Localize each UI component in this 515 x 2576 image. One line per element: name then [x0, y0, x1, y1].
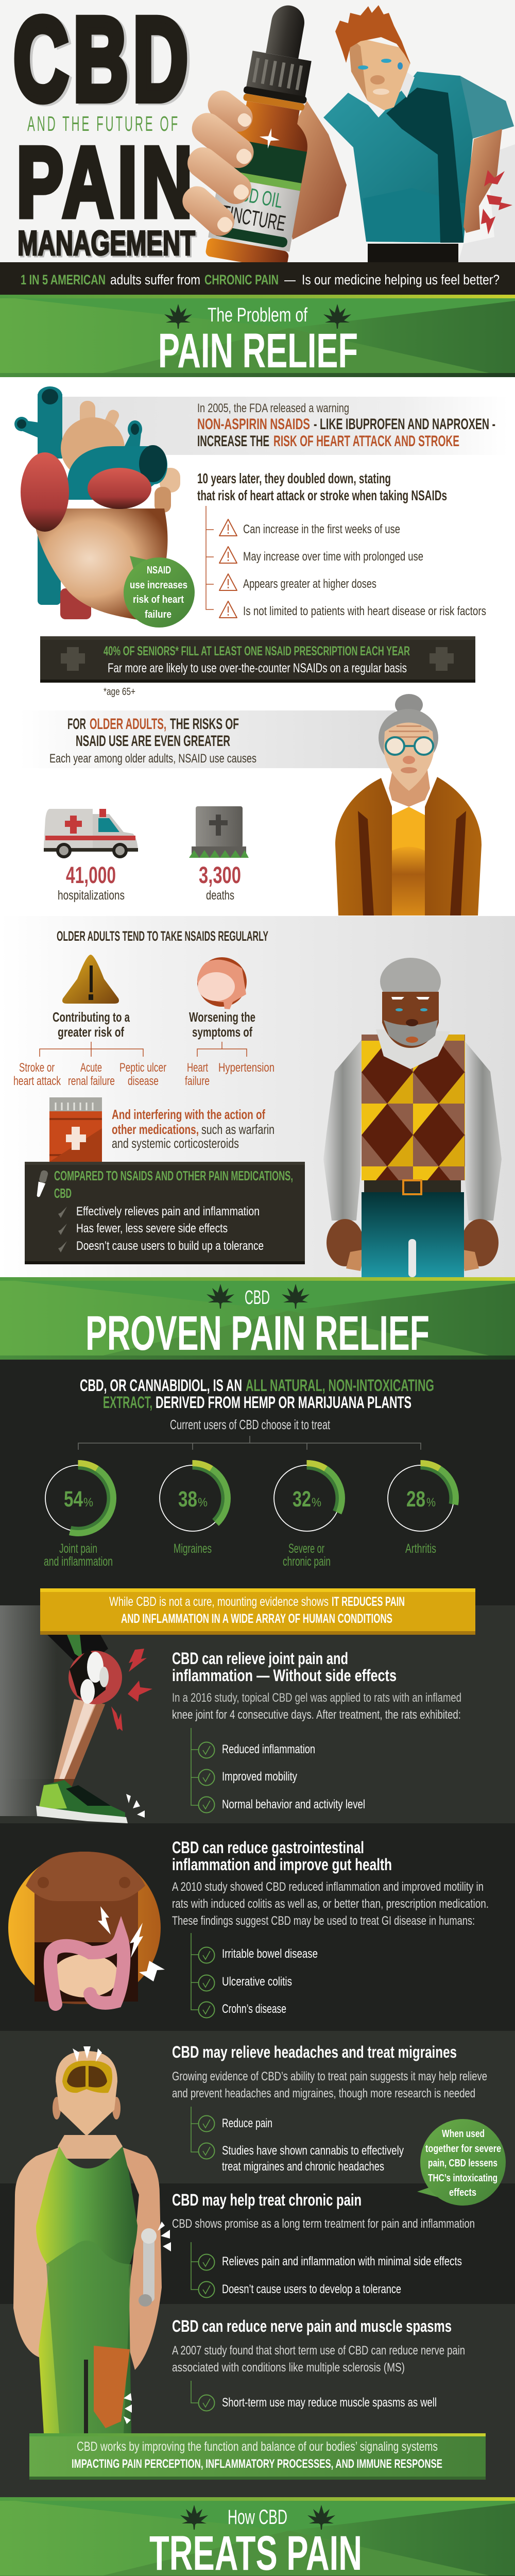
leg illustration — [36, 1635, 152, 1823]
migraine block: Studies have shown cannabis to effectively — [222, 2144, 404, 2158]
icon: caution triangle — [62, 955, 119, 1004]
NSAID risk statement — [197, 470, 447, 503]
joint pain block — [172, 1649, 461, 1812]
callout: THC: When used — [442, 2128, 485, 2140]
icon: dropper — [35, 1170, 48, 1198]
gut block: Irritable bowel disease — [222, 1947, 318, 1961]
tagline bar: adults suffer from — [110, 272, 200, 287]
heart failure callout: NSAID — [147, 565, 171, 576]
panel: regular NSAID use — [0, 916, 515, 1277]
stat: deaths: 3,300 — [199, 862, 241, 888]
donut: arthritis 28%: Arthritis — [405, 1541, 436, 1556]
gut block: inflammation and improve gut health — [172, 1855, 392, 1874]
callout: THC — [417, 2119, 506, 2206]
nerve pain block: Short-term use may reduce muscle spasms as well — [222, 2396, 437, 2410]
title: PAIN — [16, 126, 197, 238]
title — [13, 0, 197, 264]
NSAID risk statement: 10 years later, they doubled down, stating — [197, 470, 391, 486]
donut: migraines 38%: Migraines — [174, 1541, 212, 1556]
text: contributing: greater risk of — [58, 1024, 124, 1040]
footnote: *age 65+ — [104, 686, 135, 698]
donut: chronic pain 32%: Severe or — [288, 1541, 324, 1556]
section banner: pain relief: PAIN RELIEF — [158, 324, 358, 378]
text: interfering with medications — [112, 1107, 274, 1151]
tagline bar: 1 IN 5 AMERICAN — [21, 272, 106, 287]
migraine block: Reduce pain — [222, 2116, 272, 2130]
gut block — [172, 1838, 489, 2018]
CBD oil bottle — [205, 0, 332, 270]
nerve pain block: associated with conditions like multiple sclerosis (MS) — [172, 2361, 405, 2375]
CBD oil bottle: CBD OIL — [230, 181, 284, 213]
stat: deaths: deaths — [206, 888, 234, 903]
risk tree: heart attack — [13, 1074, 61, 1088]
title: MANAGEMENT — [19, 225, 197, 264]
risk tree: Heart — [187, 1061, 208, 1075]
panel: regular NSAID use: OLDER ADULTS TEND TO TAKE NSAIDS REGULARLY — [57, 928, 268, 944]
stat: hospitalizations: 41,000 — [66, 862, 116, 888]
hero background — [0, 0, 515, 262]
icon: inflamed head — [197, 957, 247, 1009]
section banner: treats pain — [0, 2497, 515, 2576]
NSAID warnings list: May increase over time with prolonged use — [243, 550, 423, 564]
donut: joint pain 54%: and inflammation — [44, 1554, 113, 1569]
donut: arthritis 28% — [386, 1463, 456, 1556]
icon: ambulance — [44, 809, 138, 858]
text: interfering with medications: such as warfarin — [201, 1122, 274, 1137]
panel: CBD compared: CBD — [54, 1185, 72, 1201]
joint pain block: inflammation — Without side effects — [172, 1666, 397, 1685]
tagline bar — [0, 262, 515, 295]
older adults strip: THE RISKS OF — [170, 716, 239, 733]
donut: migraines 38%: 38 — [178, 1487, 197, 1512]
callout: CBD reduces pain: While CBD is not a cure, mounting evidence shows — [109, 1595, 329, 1609]
panel: CBD compared: COMPARED TO NSAIDS AND OTHER PAIN MEDICATIONS, — [54, 1168, 293, 1183]
risk tree: renal failure — [68, 1074, 115, 1088]
FDA warning strip: INCREASE THE — [197, 433, 269, 450]
donut: joint pain 54%: % — [83, 1496, 93, 1510]
section banner: proven pain relief: CBD — [245, 1287, 270, 1309]
joint pain block: Improved mobility — [222, 1770, 297, 1784]
dark section backgrounds — [0, 1360, 515, 2497]
joint pain block: Normal behavior and activity level — [222, 1798, 365, 1811]
woman illustration — [13, 2046, 171, 2433]
risk tree: disease — [128, 1074, 159, 1088]
heart failure callout: use increases — [130, 580, 187, 591]
NSAID warnings list: Appears greater at higher doses — [243, 577, 376, 591]
donut: chronic pain 32%: % — [312, 1496, 321, 1510]
donut: chronic pain 32%: chronic pain — [283, 1554, 331, 1569]
NSAID warnings list — [206, 506, 486, 618]
gut block: Ulcerative colitis — [222, 1975, 292, 1989]
chronic pain block — [172, 2191, 475, 2298]
heart failure callout: failure — [145, 609, 171, 620]
callout: THC: effects — [449, 2187, 476, 2198]
donut: migraines 38% — [158, 1463, 228, 1556]
icon: tombstone — [189, 806, 249, 858]
tagline bar: CHRONIC PAIN — [204, 272, 279, 287]
FDA warning strip: In 2005, the FDA released a warning — [197, 401, 349, 415]
CBD definition — [80, 1376, 434, 1412]
donut: arthritis 28%: 28 — [406, 1487, 425, 1512]
CBD definition: CBD, OR CANNABIDIOL, IS AN — [80, 1376, 242, 1395]
migraine block: treat migraines and chronic headaches — [222, 2160, 384, 2174]
panel: CBD compared: Has fewer, less severe side effects — [76, 1222, 228, 1235]
callout: signaling systems — [29, 2433, 486, 2480]
subhead: current users: Current users of CBD choose it to treat — [170, 1417, 331, 1432]
FDA warning strip — [62, 397, 508, 455]
text: interfering with medications: other medications, — [112, 1122, 199, 1137]
nerve pain block — [172, 2317, 465, 2411]
CBD definition: EXTRACT, — [103, 1393, 152, 1412]
risk tree: failure — [185, 1074, 210, 1088]
stat: hospitalizations — [58, 862, 125, 903]
donut: joint pain 54% — [43, 1463, 113, 1569]
heart failure callout — [124, 556, 195, 628]
donut: chronic pain 32%: 32 — [293, 1487, 311, 1512]
stat: hospitalizations: hospitalizations — [58, 888, 125, 903]
hand fingers — [177, 85, 260, 242]
hand palm — [278, 101, 347, 240]
FDA warning strip: NON-ASPIRIN NSAIDS — [197, 416, 310, 433]
risk tree: Acute — [80, 1061, 102, 1075]
text: worsening: Worsening the — [189, 1009, 255, 1025]
joint pain block: CBD can relieve joint pain and — [172, 1649, 348, 1668]
text: interfering with medications: and systemic corticosteroids — [112, 1136, 239, 1151]
section banner: proven pain relief — [0, 1277, 515, 1361]
icon: pill bottle — [49, 1097, 102, 1162]
panel: CBD compared: Doesn’t cause users to build up a tolerance — [76, 1239, 264, 1253]
callout: CBD reduces pain — [40, 1588, 475, 1635]
users tree — [78, 1436, 421, 1450]
panel: CBD compared: Effectively relieves pain and inflammation — [76, 1205, 260, 1218]
text: worsening — [189, 1009, 255, 1040]
tagline bar: — — [284, 272, 296, 287]
donut: chronic pain 32% — [272, 1463, 342, 1569]
man in pain — [323, 5, 515, 262]
donut: joint pain 54%: Joint pain — [59, 1541, 97, 1556]
risk tree: Hypertension — [218, 1061, 274, 1075]
NSAID warnings list: Can increase in the first weeks of use — [243, 522, 400, 536]
callout: CBD reduces pain: IT REDUCES PAIN — [332, 1595, 405, 1609]
stat: deaths — [199, 862, 241, 903]
donut: joint pain 54%: 54 — [64, 1487, 83, 1512]
risk tree — [13, 1042, 274, 1088]
gut block: Crohn’s disease — [222, 2002, 286, 2016]
gut block: CBD can reduce gastrointestinal — [172, 1838, 364, 1857]
seniors prescription panel: Far more are likely to use over-the-counter NSAIDs on a regular basis — [108, 661, 407, 675]
risk tree: Stroke or — [19, 1061, 55, 1075]
older adults strip: FOR — [67, 716, 86, 733]
older man illustration — [323, 958, 502, 1277]
heart failure callout: risk of heart — [133, 594, 184, 605]
donut: migraines 38%: % — [198, 1496, 208, 1510]
joint pain block: Reduced inflammation — [222, 1742, 315, 1756]
migraine block — [172, 2043, 487, 2174]
seniors prescription panel — [40, 636, 475, 683]
text: contributing: Contributing to a — [53, 1009, 130, 1025]
section banner: pain relief — [0, 295, 515, 378]
gut illustration — [8, 1852, 165, 2004]
donut: arthritis 28%: % — [426, 1496, 436, 1510]
text: contributing — [53, 1009, 130, 1040]
older adults strip: NSAID USE ARE EVEN GREATER — [76, 733, 230, 750]
text: worsening: symptoms of — [192, 1024, 252, 1040]
title: AND THE FUTURE OF — [27, 112, 180, 135]
risk tree: Peptic ulcer — [119, 1061, 166, 1075]
older adults strip: OLDER ADULTS, — [90, 716, 166, 733]
chronic pain block: CBD may help treat chronic pain — [172, 2191, 362, 2209]
heart illustration — [14, 386, 180, 620]
title: MANAGEMENT — [18, 224, 195, 263]
chronic pain block: Doesn’t cause users to develop a tolerance — [222, 2282, 401, 2296]
text: interfering with medications: And interfering with the action of — [112, 1107, 265, 1122]
CBD oil bottle: TINCTURE — [220, 200, 287, 235]
older adults strip — [20, 710, 396, 768]
older woman illustration — [335, 694, 482, 916]
callout: CBD reduces pain: AND INFLAMMATION IN A WIDE ARRAY OF HUMAN CONDITIONS — [121, 1612, 392, 1626]
section banner: treats pain: How CBD — [228, 2506, 287, 2529]
older adults strip: Each year among older adults, NSAID use causes — [49, 752, 256, 766]
section banner: pain relief: The Problem of — [208, 304, 307, 326]
panel: CBD compared — [25, 1162, 305, 1264]
